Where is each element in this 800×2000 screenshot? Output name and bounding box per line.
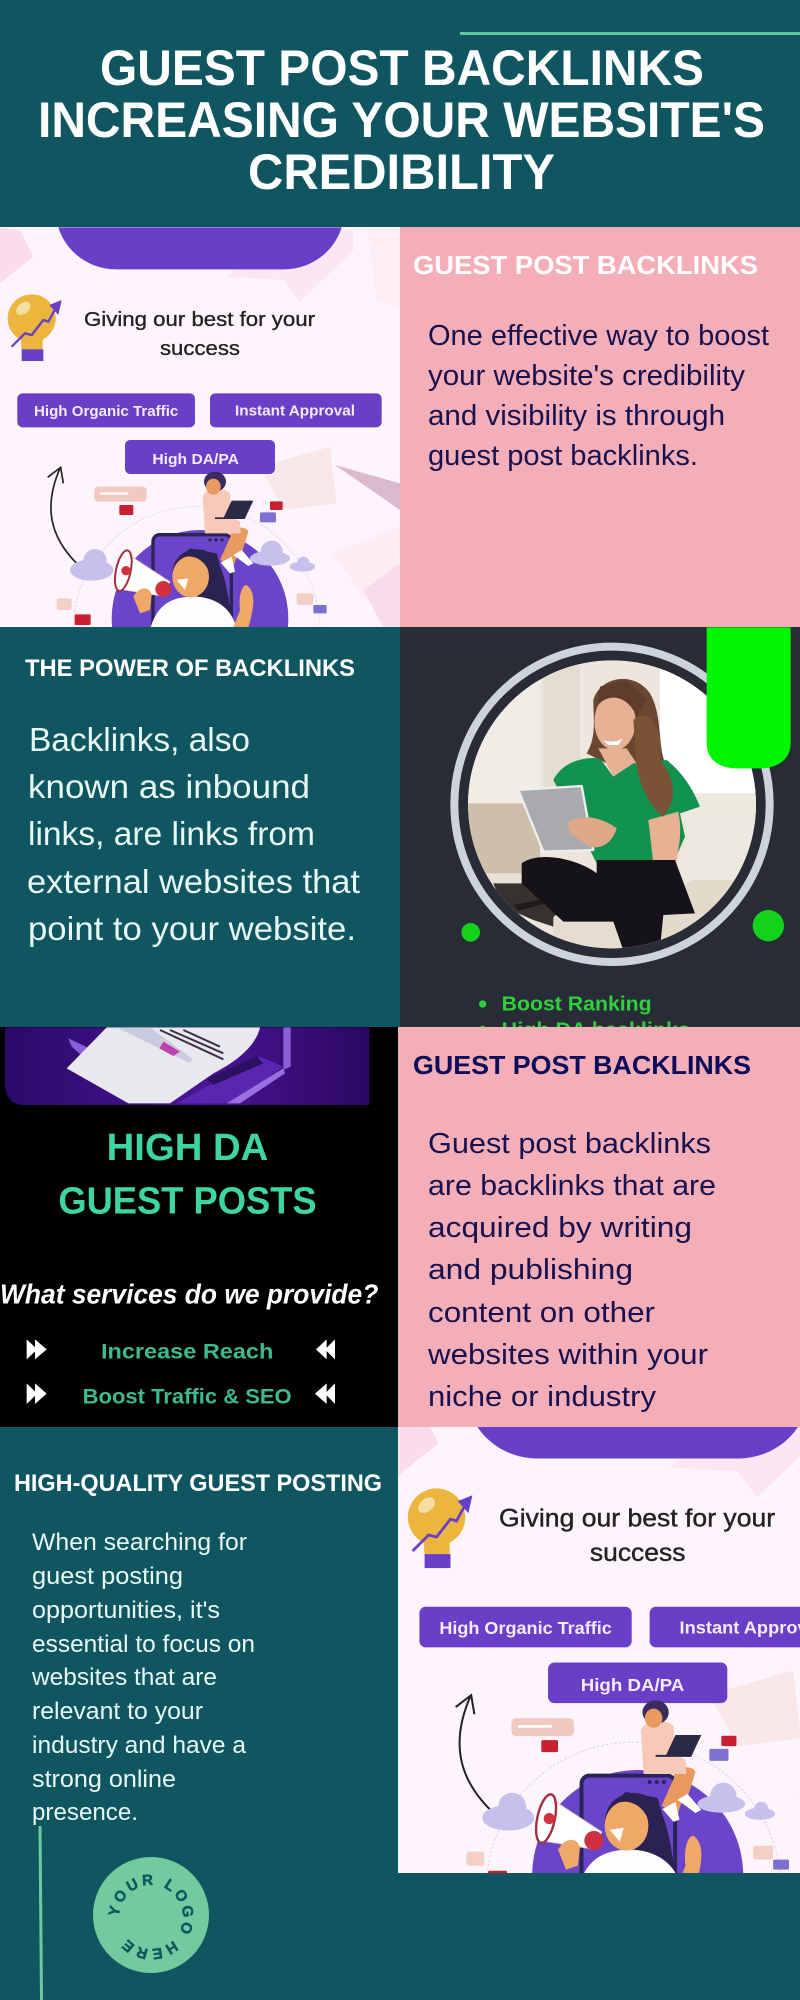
- service: boost traffic and seo: [26, 1384, 335, 1404]
- body text: backlinks definition: known as inbound: [28, 768, 310, 805]
- panel: success illustration bottom: Giving our best for your: [499, 1505, 775, 1532]
- photo: woman with tablet: [467, 657, 760, 953]
- heading: the power of backlinks: THE POWER OF BACKLINKS: [25, 655, 355, 682]
- body text: definition: niche or industry: [428, 1381, 657, 1413]
- title: GUEST POST BACKLINKS: [100, 40, 704, 96]
- body text: definition: websites within your: [427, 1339, 708, 1371]
- panel: high DA guest posts: [0, 1027, 398, 1427]
- bullet list: Boost Ranking: [502, 994, 652, 1016]
- panel: success illustration bottom: High Organic Traffic: [439, 1618, 612, 1638]
- service: increase reach: [26, 1339, 335, 1360]
- body text: relevance advice: websites that are: [31, 1664, 217, 1691]
- body text: relevance advice: industry and have a: [32, 1732, 246, 1759]
- body text: definition: content on other: [428, 1297, 655, 1329]
- panel: success illustration top: Instant Approval: [235, 404, 355, 420]
- panel: success illustration top: success: [160, 337, 240, 360]
- body text: definition: and publishing: [428, 1254, 633, 1286]
- body text: backlinks definition: external websites that: [27, 863, 360, 900]
- title: INCREASING YOUR WEBSITE'S: [38, 92, 765, 148]
- body text: relevance advice: [31, 1529, 255, 1826]
- heading: high da guest posts: HIGH DA: [107, 1127, 268, 1169]
- green dots: [461, 910, 784, 942]
- body text: relevance advice: essential to focus on: [32, 1631, 255, 1658]
- bullet list: [479, 996, 688, 1027]
- body text: backlinks definition: Backlinks, also: [29, 721, 250, 758]
- panel: success illustration bottom: High DA/PA: [581, 1675, 685, 1695]
- heading: high-quality guest posting: HIGH-QUALITY GUEST POSTING: [14, 1470, 382, 1497]
- panel: guest post backlinks pink: [400, 227, 800, 627]
- body text: intro: [428, 320, 769, 472]
- panel: high-quality guest posting: [0, 1427, 398, 2000]
- heading: high da guest posts: GUEST POSTS: [58, 1180, 317, 1222]
- body text: backlinks definition: links, are links from: [28, 815, 315, 852]
- body text: intro: One effective way to boost: [428, 320, 769, 352]
- green block: [707, 627, 791, 768]
- heading: guest post backlinks navy: GUEST POST BACKLINKS: [413, 1050, 751, 1080]
- body text: definition: are backlinks that are: [428, 1170, 716, 1202]
- panel: success illustration top: High DA/PA: [152, 452, 239, 468]
- body text: intro: your website's credibility: [428, 360, 746, 392]
- panel: the power of backlinks: [0, 627, 400, 1027]
- body text: relevance advice: presence.: [32, 1799, 138, 1826]
- service: increase reach: Increase Reach: [101, 1339, 273, 1363]
- body text: backlinks definition: [27, 721, 360, 947]
- bullet list: High DA backlinks: [502, 1020, 690, 1042]
- body text: intro: and visibility is through: [428, 400, 725, 432]
- title: [38, 40, 765, 200]
- title: CREDIBILITY: [248, 144, 555, 200]
- panel: success illustration top: High Organic Traffic: [34, 404, 178, 420]
- body text: intro: guest post backlinks.: [428, 440, 698, 472]
- body text: definition: Guest post backlinks: [428, 1128, 711, 1160]
- vertical accent line: [38, 1826, 43, 2000]
- ring around photo: [454, 647, 770, 962]
- purple laptop banner: [5, 1027, 369, 1105]
- body text: relevance advice: strong online: [32, 1766, 176, 1793]
- header band: [0, 0, 800, 227]
- logo badge: YOUR LOGO HERE: [108, 1874, 194, 1960]
- service: boost traffic and seo: Boost Traffic & SEO: [83, 1384, 292, 1408]
- panel: success illustration top: Giving our best for your: [84, 308, 315, 331]
- body text: relevance advice: opportunities, it's: [32, 1597, 220, 1624]
- panel: success illustration bottom: success: [590, 1540, 685, 1567]
- body text: definition: acquired by writing: [428, 1212, 692, 1244]
- panel: success illustration top: [0, 227, 400, 627]
- body text: relevance advice: When searching for: [32, 1529, 247, 1556]
- heading: high da guest posts: [60, 1134, 316, 1214]
- body text: backlinks definition: point to your website.: [28, 910, 356, 947]
- body text: relevance advice: guest posting: [32, 1563, 183, 1590]
- subheading: services: What services do we provide?: [0, 1278, 378, 1309]
- panel: woman with tablet: [400, 620, 800, 1042]
- logo badge: [93, 1857, 209, 1973]
- heading: guest post backlinks: GUEST POST BACKLINKS: [413, 250, 758, 280]
- body text: relevance advice: relevant to your: [32, 1698, 203, 1725]
- body text: definition: [427, 1128, 716, 1413]
- panel: success illustration bottom: [398, 1427, 800, 1873]
- panel: guest post backlinks definition: [398, 1027, 800, 1427]
